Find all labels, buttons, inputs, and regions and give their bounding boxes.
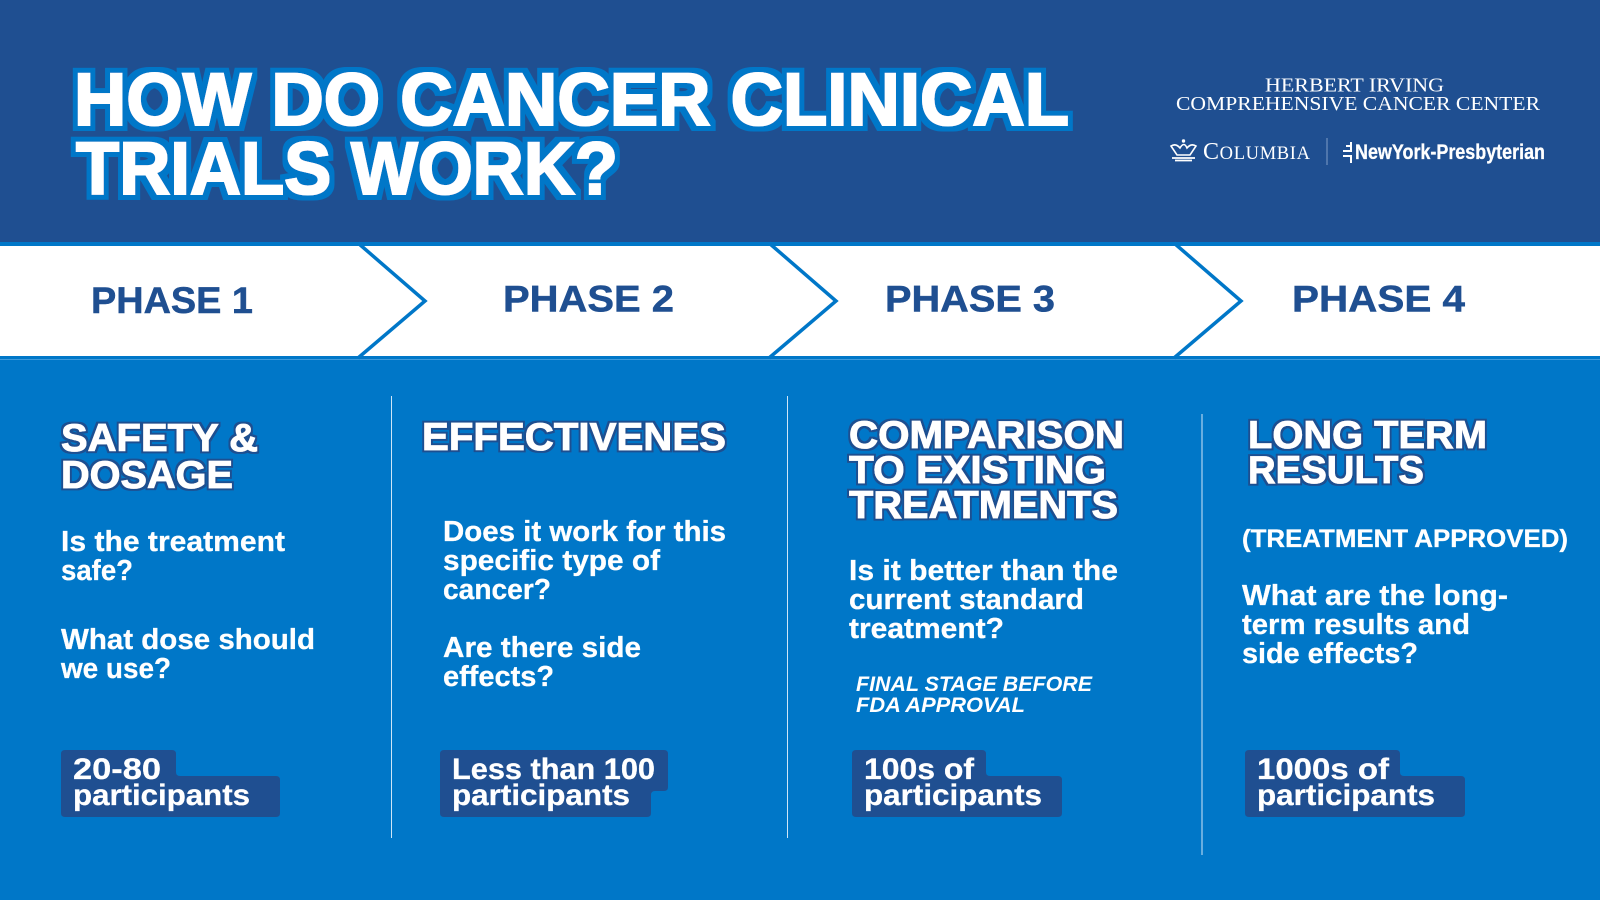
panel: phase 1 column	[60, 417, 315, 817]
logo: NewYork-Presbyterian mark	[1343, 142, 1352, 163]
panel: phase 2 column	[422, 416, 726, 817]
logo: Columbia wordmark: COLUMBIA	[1203, 139, 1311, 165]
text: phase 1 questions: Is the treatment	[61, 526, 285, 558]
text: phase 4 questions	[1242, 580, 1508, 670]
subheading: treatment approved: (TREATMENT APPROVED)	[1242, 525, 1568, 553]
heading: comparison to existing treatments	[849, 414, 1124, 527]
badge: less than 100 participants	[440, 750, 668, 817]
badge: 20-80 participants	[61, 750, 280, 817]
chevron arrow 2	[769, 243, 836, 358]
note: final stage before FDA approval: FINAL STAGE BEFORE	[856, 672, 1093, 696]
text: phase 2 questions: effects?	[443, 661, 554, 693]
text: phase 1 questions: What dose should	[61, 624, 315, 656]
heading: comparison to existing treatments: TREATMENTS	[849, 484, 1118, 527]
title: TRIALS WORK?	[76, 127, 618, 210]
badge: 1000s of participants	[1245, 750, 1465, 817]
logo: NewYork-Presbyterian wordmark: NewYork-Presbyterian	[1355, 141, 1545, 164]
heading: comparison to existing treatments: TO EXISTING	[849, 449, 1106, 492]
badge: 1000s of participants: participants	[1257, 779, 1435, 812]
panel: phase 3 column	[849, 414, 1124, 817]
text: phase 2 questions: Does it work for this	[443, 516, 726, 548]
badge: less than 100 participants: Less than 100	[452, 753, 655, 786]
phase label 1: PHASE 1	[91, 280, 253, 321]
badge: 100s of participants	[852, 750, 1062, 817]
heading: safety and dosage: DOSAGE	[61, 454, 233, 497]
text: phase 3 questions: current standard	[849, 584, 1084, 616]
badge: 100s of participants: participants	[864, 779, 1042, 812]
text: phase 1 questions: we use?	[60, 653, 171, 685]
text: phase 3 questions	[849, 555, 1118, 645]
logo divider	[1326, 138, 1328, 165]
text: phase 2 questions: Are there side	[443, 632, 641, 664]
heading: long term results	[1248, 414, 1487, 492]
heading: long term results: RESULTS	[1248, 449, 1424, 492]
text: phase 2 questions: specific type of	[443, 545, 660, 577]
text: phase 1 questions	[60, 526, 315, 685]
phase label 3: PHASE 3	[885, 278, 1055, 320]
text: phase 2 questions: cancer?	[443, 574, 551, 606]
logo: Herbert Irving Comprehensive Cancer Center wordmark: COMPREHENSIVE CANCER CENTER	[1176, 93, 1540, 115]
logo: Herbert Irving Comprehensive Cancer Center wordmark	[1176, 74, 1540, 115]
phase label 2: PHASE 2	[503, 278, 674, 320]
panel: header band	[0, 0, 1600, 242]
badge: 1000s of participants: 1000s of	[1257, 753, 1390, 786]
badge: less than 100 participants: participants	[452, 779, 630, 812]
heading: safety and dosage	[61, 417, 258, 497]
heading: safety and dosage: SAFETY &	[61, 417, 258, 460]
badge: 20-80 participants: participants	[73, 779, 250, 812]
note: final stage before FDA approval	[856, 672, 1093, 717]
chevron arrow 3	[1174, 243, 1241, 358]
title: HOW DO CANCER CLINICAL	[74, 58, 1069, 141]
badge: 100s of participants: 100s of	[864, 753, 975, 786]
title	[74, 58, 1069, 210]
text: phase 3 questions: Is it better than the	[849, 555, 1118, 587]
heading: comparison to existing treatments: COMPARISON	[849, 414, 1124, 457]
text: phase 1 questions: safe?	[61, 555, 133, 587]
badge: 20-80 participants: 20-80	[73, 753, 161, 786]
text: phase 2 questions	[443, 516, 726, 693]
heading: long term results: LONG TERM	[1248, 414, 1487, 457]
logo: Herbert Irving Comprehensive Cancer Center wordmark: HERBERT IRVING	[1265, 74, 1444, 96]
chevron arrow 1	[358, 243, 425, 358]
phase label 4: PHASE 4	[1292, 278, 1465, 320]
heading: effectivenes: EFFECTIVENES	[422, 416, 726, 459]
note: final stage before FDA approval: FDA APPROVAL	[856, 693, 1025, 717]
panel: phase 4 column	[1242, 414, 1568, 817]
text: phase 4 questions: term results and	[1242, 609, 1470, 641]
text: phase 4 questions: What are the long-	[1242, 580, 1508, 612]
text: phase 3 questions: treatment?	[849, 613, 1004, 645]
text: phase 4 questions: side effects?	[1242, 638, 1418, 670]
logo: Columbia crown icon	[1171, 139, 1196, 160]
panel: phase arrow band	[0, 242, 1600, 360]
